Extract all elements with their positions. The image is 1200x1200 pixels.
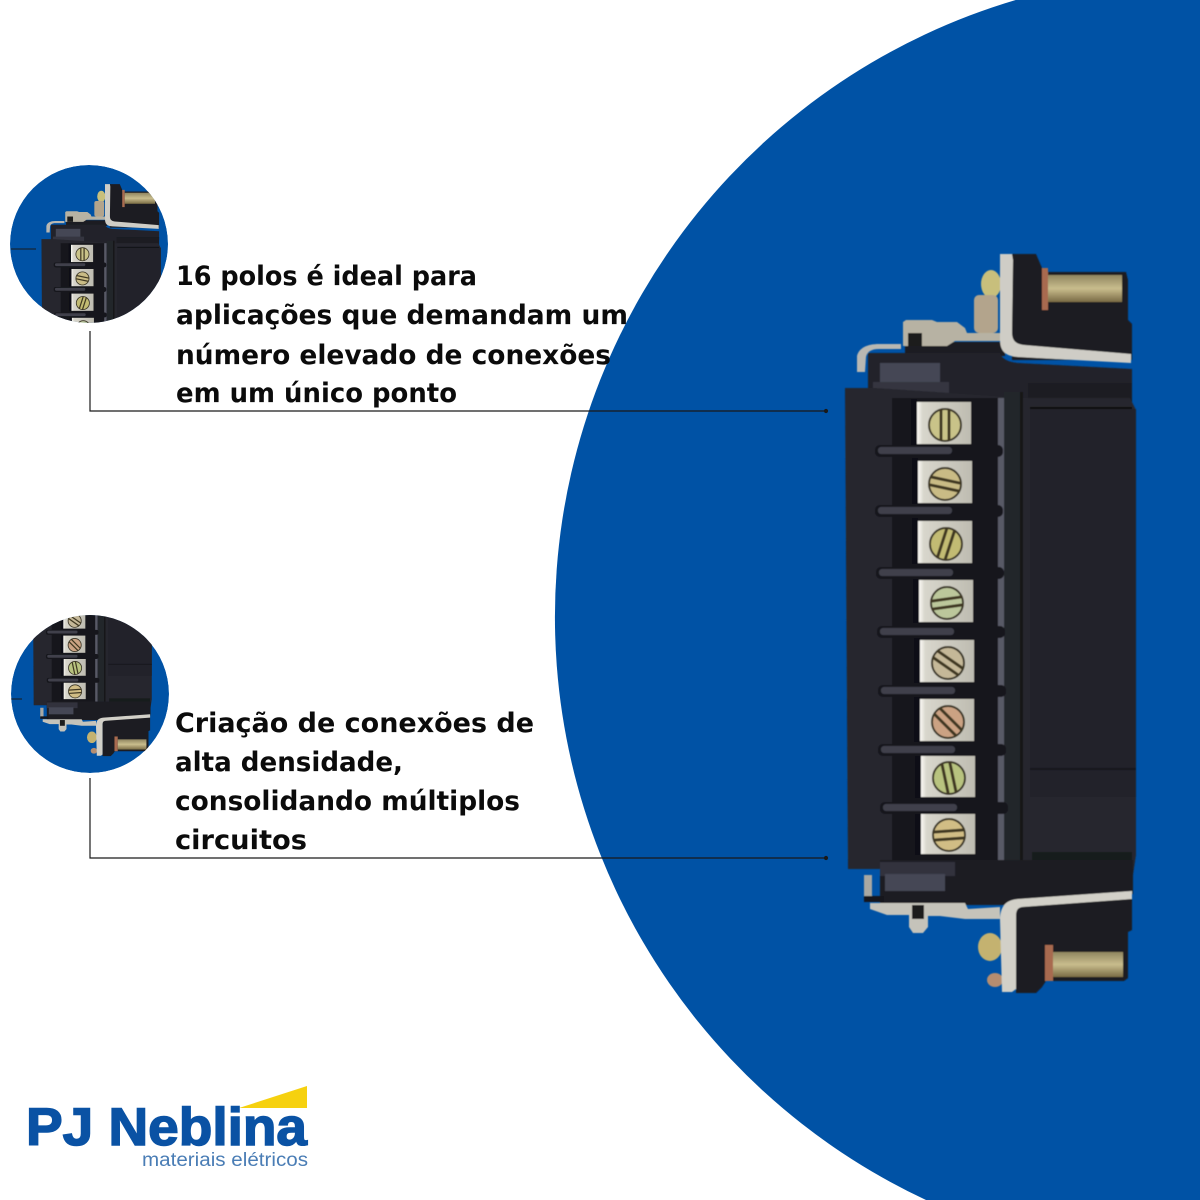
thumbnail: bottom of connector <box>11 615 169 773</box>
background blue circle <box>555 0 1200 1200</box>
text block: 16 polos: 16 polos é ideal para <box>176 261 477 292</box>
text block: 16 polos <box>176 261 628 409</box>
text block: alta densidade: circuitos <box>175 825 307 856</box>
logo yellow wedge <box>239 1086 307 1108</box>
text block: 16 polos: aplicações que demandam um <box>176 300 628 331</box>
text block: 16 polos: número elevado de conexões <box>176 340 611 371</box>
text block: alta densidade: alta densidade, <box>175 747 403 778</box>
text block: 16 polos: em um único ponto <box>176 378 457 409</box>
thumbnail: top of connector <box>10 165 168 323</box>
logo: PJ Neblina <box>26 1086 308 1171</box>
leader line: second callout <box>90 778 828 860</box>
product photo: connector <box>845 254 1136 993</box>
text block: alta densidade <box>175 708 534 856</box>
text block: alta densidade: consolidando múltiplos <box>175 786 520 817</box>
logo wordmark: PJ Neblina <box>26 1098 308 1157</box>
text block: alta densidade: Criação de conexões de <box>175 708 534 739</box>
logo tagline: materiais elétricos <box>142 1150 308 1171</box>
leader line: first callout <box>90 331 828 412</box>
